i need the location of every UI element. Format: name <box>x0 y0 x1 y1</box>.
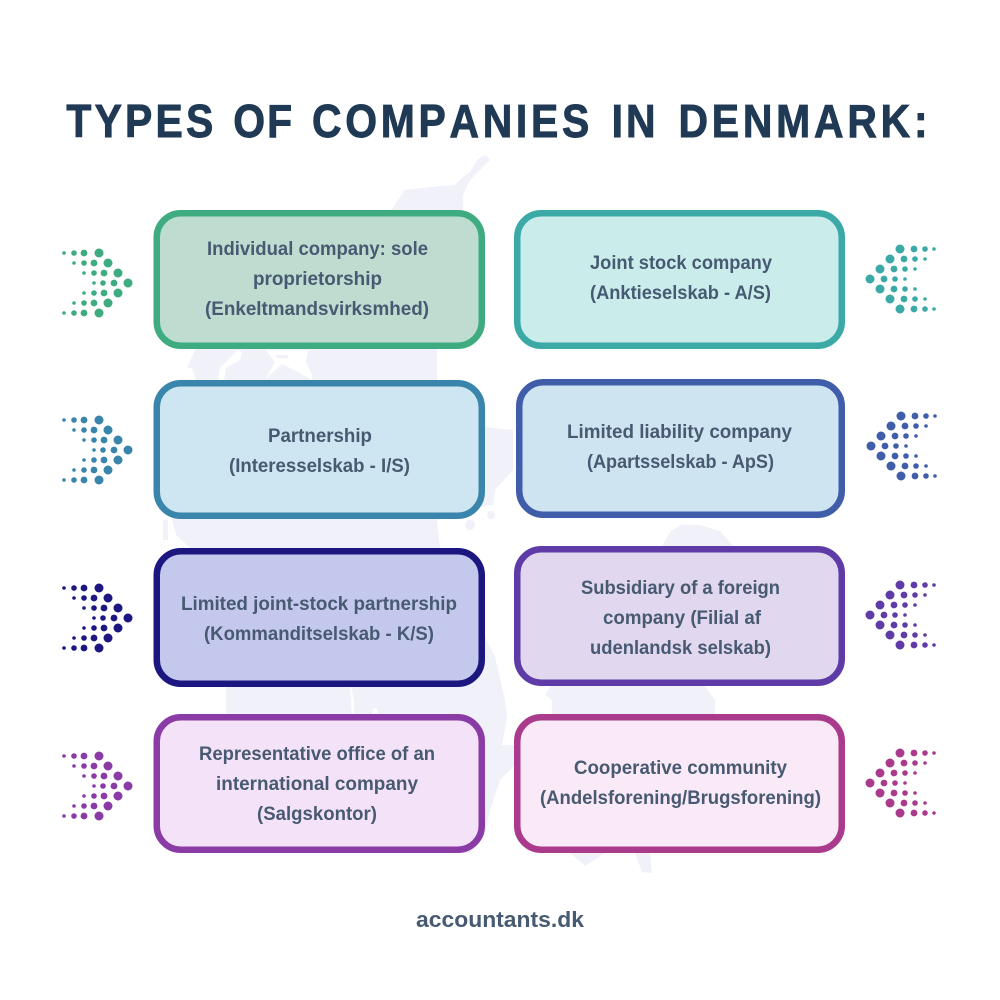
panel: individual company <box>157 213 482 346</box>
panel: limited joint-stock partnership: Limited joint-stock partnership <box>181 593 457 615</box>
panel: partnership <box>157 383 482 516</box>
arrow: row 1 left <box>62 248 133 318</box>
title: IN <box>612 96 659 148</box>
arrow: row 4 right <box>866 748 936 818</box>
panel: representative office: Representative office of an <box>199 743 435 765</box>
panel: limited joint-stock partnership <box>157 551 482 684</box>
panel: joint stock company <box>517 213 842 346</box>
panel: representative office: (Salgskontor) <box>257 803 377 825</box>
panel: subsidiary of a foreign company: Subsidiary of a foreign <box>581 577 780 599</box>
arrow: row 2 left <box>62 416 133 484</box>
panel: limited liability company: Limited liability company <box>567 421 792 443</box>
panel: individual company: Individual company: sole <box>207 238 428 260</box>
footer brand: accountants.dk <box>416 907 585 932</box>
arrow: row 3 left <box>62 584 133 652</box>
panel: representative office: international company <box>216 773 418 795</box>
arrow: row 3 right <box>866 580 936 650</box>
arrow: row 2 right <box>866 412 937 480</box>
panel: individual company: proprietorship <box>253 268 382 290</box>
panel: individual company: (Enkeltmandsvirksmhed) <box>205 298 429 320</box>
panel: joint stock company: Joint stock company <box>590 252 772 274</box>
title: COMPANIES <box>312 96 593 148</box>
panel: limited liability company <box>519 382 842 515</box>
arrow: row 1 right <box>866 244 936 314</box>
panel: subsidiary of a foreign company <box>517 549 842 683</box>
panel: representative office <box>157 717 482 850</box>
panel: limited joint-stock partnership: (Kommanditselskab - K/S) <box>204 623 434 645</box>
panel: limited liability company: (Apartsselskab - ApS) <box>587 451 774 473</box>
background map of Denmark <box>163 155 735 873</box>
panel: subsidiary of a foreign company: udenlandsk selskab) <box>590 637 771 659</box>
panel: cooperative community: (Andelsforening/Brugsforening) <box>540 787 821 809</box>
panel: subsidiary of a foreign company: company (Filial af <box>603 607 761 629</box>
arrow: row 4 left <box>62 752 133 820</box>
panel: cooperative community <box>517 717 842 850</box>
title: OF <box>233 96 294 148</box>
title: TYPES <box>66 96 216 148</box>
title: DENMARK: <box>678 96 931 148</box>
panel: partnership: (Interesselskab - I/S) <box>229 455 410 477</box>
panel: partnership: Partnership <box>268 425 372 447</box>
panel: joint stock company: (Anktieselskab - A/S) <box>590 282 771 304</box>
panel: cooperative community: Cooperative community <box>574 757 787 779</box>
